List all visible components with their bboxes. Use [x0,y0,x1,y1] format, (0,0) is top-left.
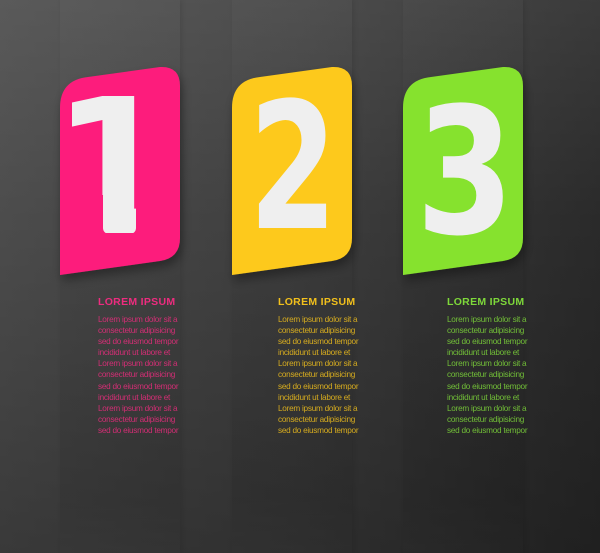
text: column 2: sed do eiusmod tempor [278,382,358,391]
text: column 1: LOREM IPSUM [98,296,175,308]
text: column 1: incididunt ut labore et [98,393,170,402]
text: column 2: Lorem ipsum dolor sit a [278,315,357,324]
text: column 2: incididunt ut labore et [278,348,350,357]
text: column 3: incididunt ut labore et [447,348,519,357]
text: column 1: consectetur adipisicing [98,415,175,424]
text: column 3 [447,296,528,435]
text: column 2: sed do eiusmod tempor [278,337,358,346]
text: column 3: consectetur adipisicing [447,415,524,424]
card 1: 1 [52,60,176,278]
text: column 1: consectetur adipisicing [98,370,175,379]
text: column 2: Lorem ipsum dolor sit a [278,359,357,368]
text: column 3: consectetur adipisicing [447,370,524,379]
text: column 2: consectetur adipisicing [278,326,355,335]
text: column 3: sed do eiusmod tempor [447,426,527,435]
text: column 2: consectetur adipisicing [278,415,355,424]
text: column 1 [98,296,178,435]
text: column 1: Lorem ipsum dolor sit a [98,315,177,324]
text: column 3: Lorem ipsum dolor sit a [447,315,526,324]
text: column 2: incididunt ut labore et [278,393,350,402]
text: column 1: sed do eiusmod tempor [98,426,178,435]
text: column 3: sed do eiusmod tempor [447,337,527,346]
text: column 3: Lorem ipsum dolor sit a [447,359,526,368]
text: column 3: incididunt ut labore et [447,393,519,402]
text: column 1: consectetur adipisicing [98,326,175,335]
number cards [60,67,526,282]
text: column 2: LOREM IPSUM [278,296,355,308]
card 2: 2 [249,66,337,270]
text: column 2: sed do eiusmod tempor [278,426,358,435]
text: column 2 [278,296,358,435]
text: column 3: LOREM IPSUM [447,296,524,308]
text: column 3: sed do eiusmod tempor [447,382,527,391]
text: column 2: Lorem ipsum dolor sit a [278,404,357,413]
text: column 1: sed do eiusmod tempor [98,382,178,391]
text: column 1: sed do eiusmod tempor [98,337,178,346]
text: column 2: consectetur adipisicing [278,370,355,379]
card 3: 3 [416,70,514,275]
text: column 1: incididunt ut labore et [98,348,170,357]
text: column 1: Lorem ipsum dolor sit a [98,359,177,368]
text: column 3: consectetur adipisicing [447,326,524,335]
text: column 1: Lorem ipsum dolor sit a [98,404,177,413]
text: column 3: Lorem ipsum dolor sit a [447,404,526,413]
